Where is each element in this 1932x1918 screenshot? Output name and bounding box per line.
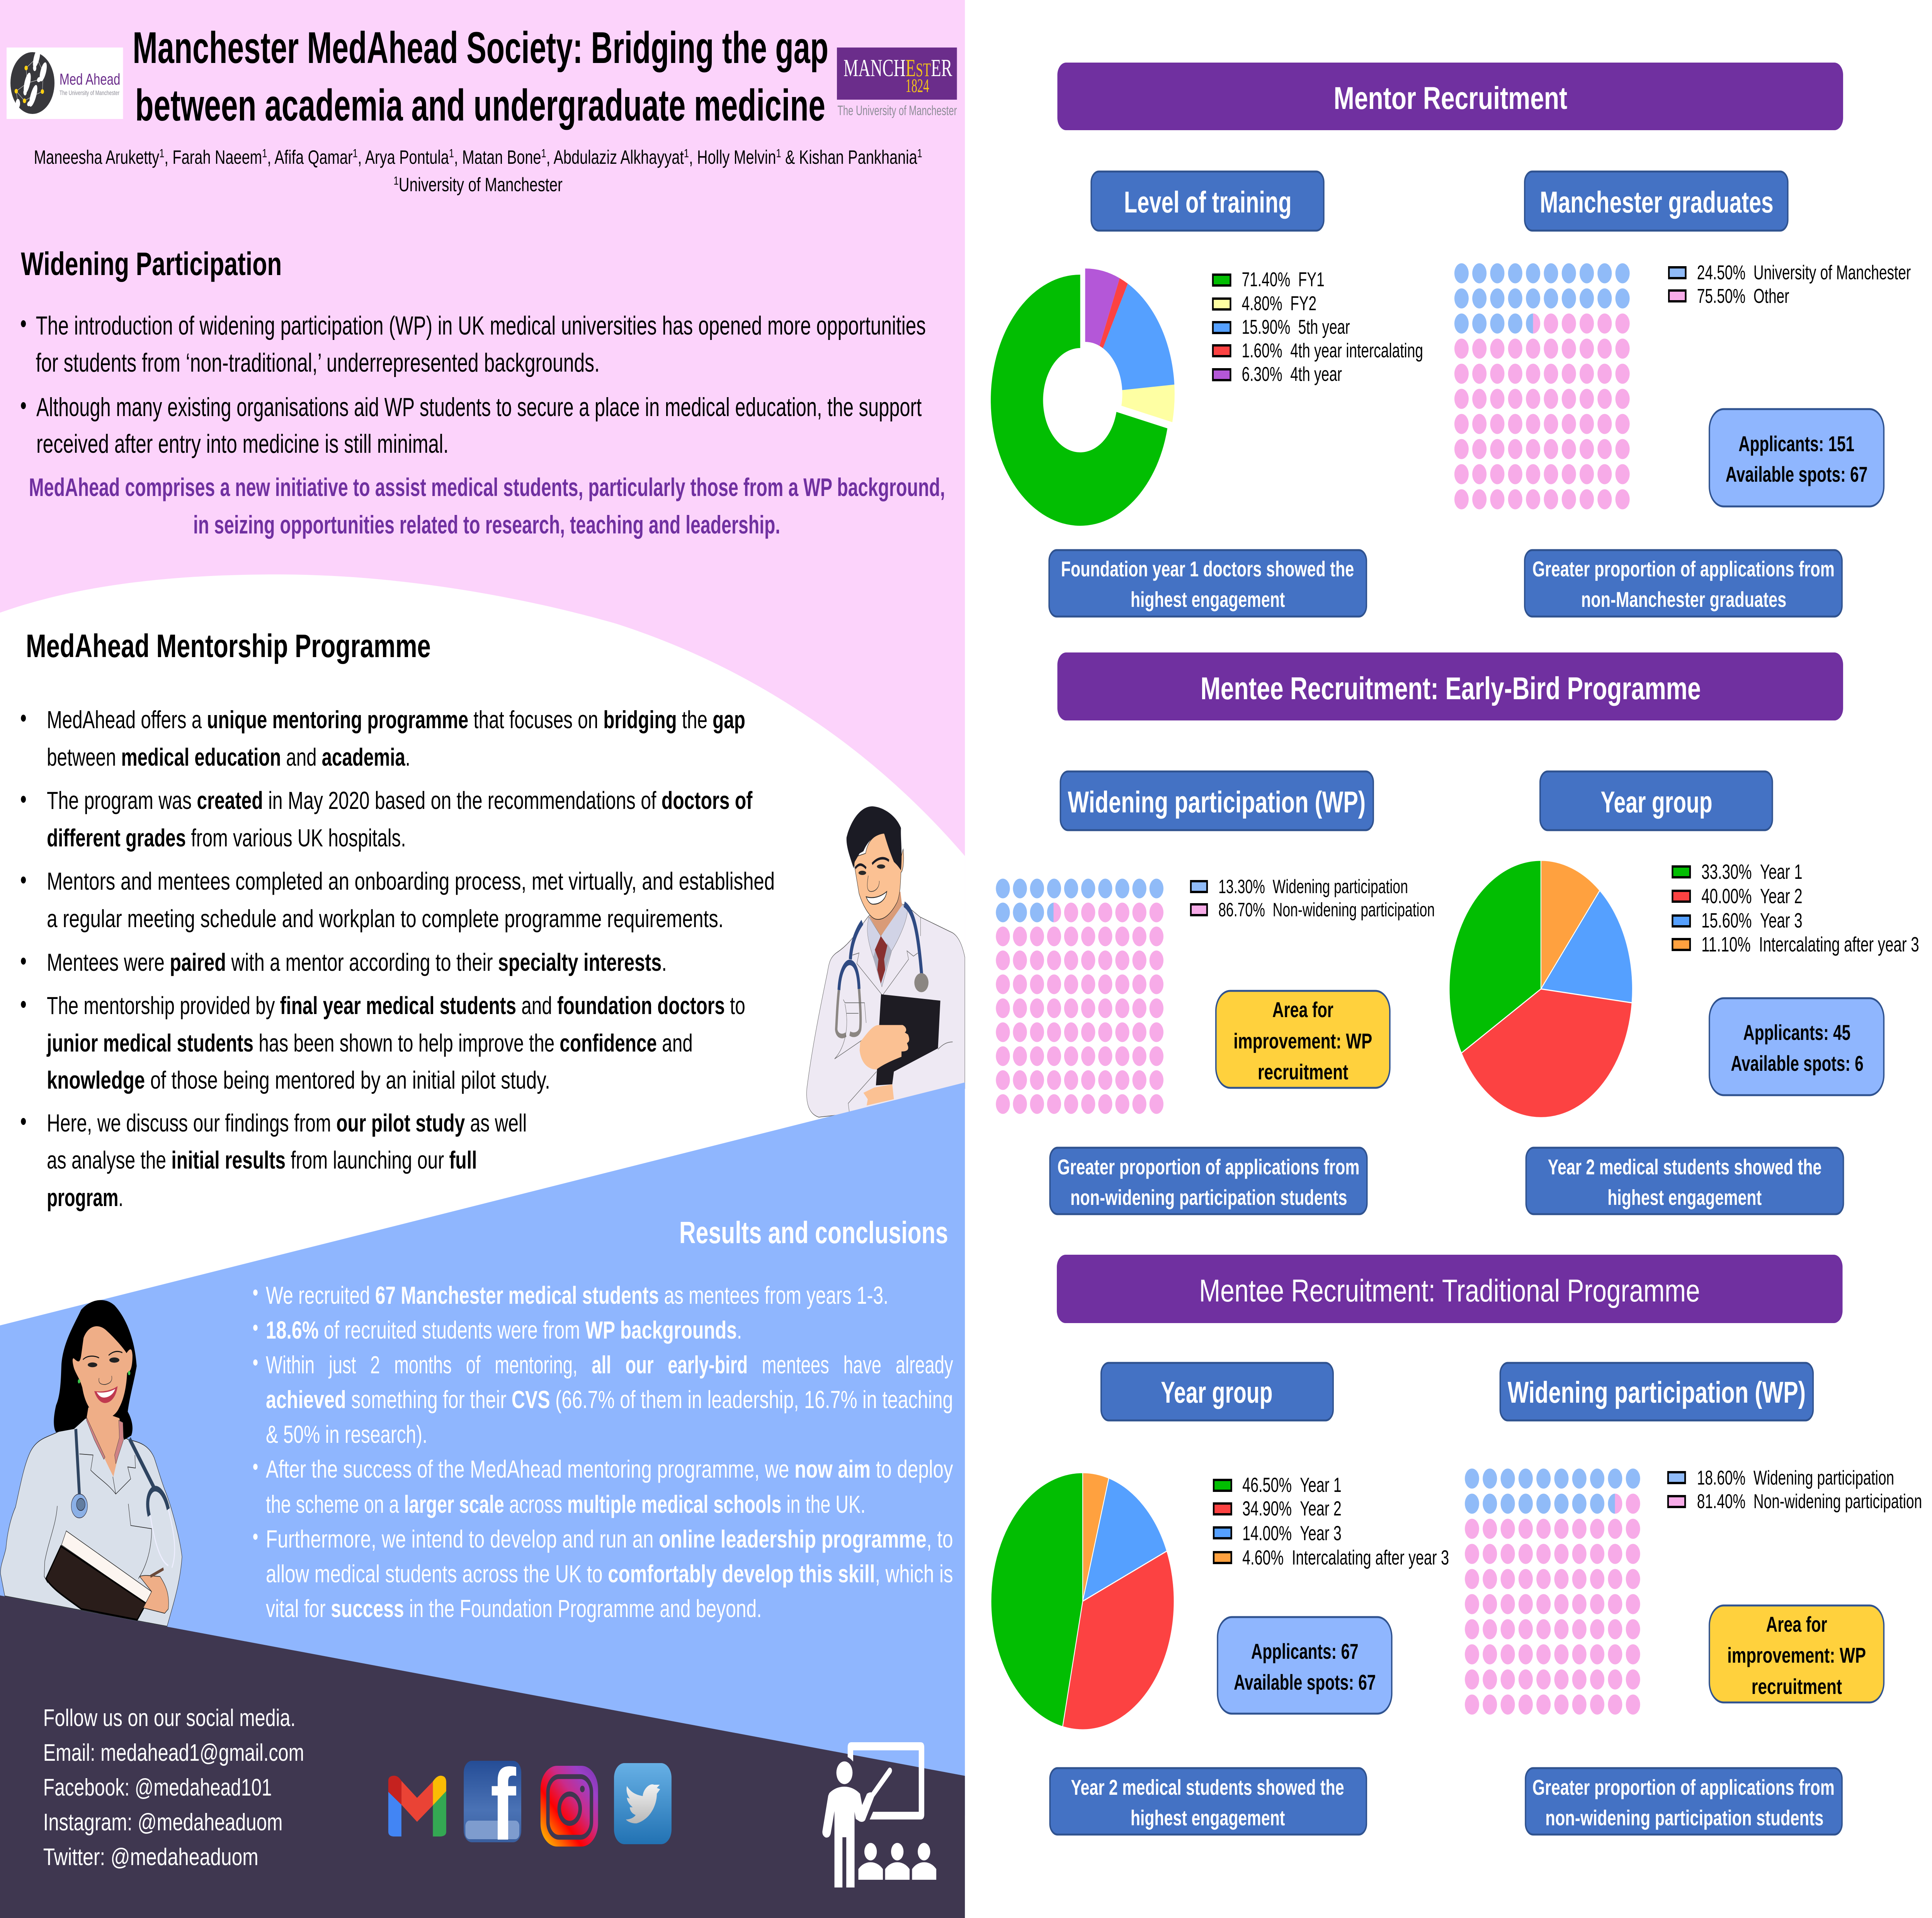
background: white curved section	[0, 574, 965, 1352]
caption: year 2 engagement	[1050, 1768, 1366, 1835]
authors and affiliation: 1	[917, 146, 922, 160]
logo: Med Ahead: Med Ahead	[60, 70, 120, 88]
icon: Facebook: f	[490, 1748, 517, 1861]
title: between academia and undergraduate medicine	[135, 81, 825, 130]
legend: year group: 33.30% Year 1	[1701, 860, 1803, 883]
callout: area for improvement: recruitment	[1258, 1060, 1348, 1084]
text block: mentorship programme bullets: program.	[47, 1184, 123, 1211]
text block: results bullets	[253, 1281, 953, 1622]
section: Mentor Recruitment	[991, 63, 1911, 617]
callout: area for improvement: Area for	[1766, 1612, 1827, 1637]
text block: social media contacts: Email: medahead1@gmail.com	[43, 1740, 304, 1766]
banner: Early-Bird Programme: Mentee Recruitment: Early-Bird Programme	[1201, 671, 1701, 706]
waffle chart: widening participation	[994, 877, 1165, 1116]
caption: non-widening participation: non-widening participation students	[1545, 1806, 1823, 1830]
text block: MedAhead purple statement	[29, 473, 945, 539]
callout: area for improvement: improvement: WP	[1727, 1643, 1866, 1668]
text block: mentorship programme bullets: junior medical students has been shown to help improve the confidence and	[46, 1029, 693, 1057]
legend: level of training	[1213, 268, 1423, 386]
legend: level of training: 4.80% FY2	[1242, 292, 1316, 315]
legend: level of training: 6.30% 4th year	[1242, 363, 1342, 386]
text block: results bullets: Within just 2 months of mentoring, all our early-bird mentees have already	[266, 1351, 953, 1379]
text block: social media contacts: Follow us on our social media.	[43, 1705, 296, 1731]
text block: results bullets: vital for success in the Foundation Programme and beyond.	[266, 1595, 762, 1622]
icon: Gmail	[388, 1776, 446, 1836]
text block: results bullets: Furthermore, we intend to develop and run an online leadership programme , to	[266, 1525, 953, 1553]
callout: area for improvement: Area for	[1272, 998, 1333, 1022]
text block: mentorship programme bullets: as analyse the initial results from launching our full	[47, 1146, 477, 1174]
callout: area for improvement: recruitment	[1752, 1675, 1842, 1699]
callout: applicants 45: Available spots: 6	[1731, 1052, 1864, 1076]
icon: Instagram	[541, 1766, 598, 1847]
text block: mentorship programme bullets	[21, 706, 775, 1211]
authors and affiliation: & Kishan Pankhania	[781, 147, 917, 168]
text block: results bullets: allow medical students across the UK to comfortably develop this skill , which is	[266, 1560, 953, 1588]
legend: year group: 14.00% Year 3	[1242, 1522, 1342, 1545]
authors and affiliation: , Arya Pontula	[358, 147, 449, 168]
heading: Manchester graduates: Manchester graduates	[1540, 186, 1774, 219]
callout: applicants 151	[1709, 409, 1884, 506]
legend: widening participation: 81.40% Non-widening participation	[1697, 1490, 1922, 1513]
legend: year group: 40.00% Year 2	[1701, 885, 1803, 908]
legend: Manchester graduates: 24.50% University of Manchester	[1697, 261, 1911, 284]
authors and affiliation: 1	[353, 146, 358, 160]
authors and affiliation	[34, 146, 922, 196]
callout: applicants 45: Applicants: 45	[1743, 1021, 1850, 1045]
caption: year 2 engagement: highest engagement	[1607, 1186, 1762, 1210]
logo: University of Manchester	[837, 48, 957, 118]
icon: Twitter	[614, 1763, 672, 1844]
text block: results bullets: & 50% in research).	[266, 1420, 427, 1448]
heading: MedAhead Mentorship Programme: MedAhead Mentorship Programme	[26, 628, 431, 664]
pie chart: year group	[1449, 860, 1633, 1118]
legend: year group	[1214, 1473, 1449, 1569]
pie chart: year group	[991, 1473, 1174, 1730]
banner: Traditional Programme: Mentee Recruitment: Traditional Programme	[1199, 1273, 1700, 1308]
text block: widening participation bullets: Although many existing organisations aid WP students to secure a place in medical education, the support	[36, 392, 922, 422]
text block: mentorship programme bullets: The mentorship provided by final year medical students and foundation doctors to	[47, 992, 745, 1019]
caption: non-widening participation: Greater proportion of applications from	[1057, 1155, 1360, 1179]
text block: mentorship programme bullets: between medical education and academia.	[47, 743, 410, 771]
authors and affiliation: 1	[541, 146, 546, 160]
authors and affiliation: 1	[449, 146, 454, 160]
text block: MedAhead purple statement: MedAhead comprises a new initiative to assist medical students, particularly those from a WP background,	[29, 473, 945, 502]
heading: Year group: Year group	[1600, 786, 1713, 819]
legend: level of training: 71.40% FY1	[1242, 268, 1325, 291]
heading: Year group	[1540, 771, 1772, 830]
callout: applicants 45	[1709, 998, 1884, 1095]
legend: year group: 34.90% Year 2	[1242, 1497, 1342, 1520]
caption: foundation year 1	[1049, 550, 1366, 617]
authors and affiliation: , Abdulaziz Alkhayyat	[546, 147, 684, 168]
illustration: male doctor	[807, 806, 965, 1117]
legend: year group: 4.60% Intercalating after year 3	[1242, 1546, 1449, 1569]
caption: non-widening participation: non-widening participation students	[1070, 1186, 1347, 1210]
legend: widening participation	[1191, 876, 1435, 921]
legend: widening participation: 86.70% Non-widening participation	[1218, 899, 1435, 921]
authors and affiliation: , Matan Bone	[454, 147, 541, 168]
text block: mentorship programme bullets: Mentees were paired with a mentor according to their specialty interests .	[47, 948, 667, 976]
caption: non-Manchester graduates	[1525, 550, 1842, 617]
callout: applicants 67	[1218, 1617, 1392, 1714]
text block: results bullets: After the success of the MedAhead mentoring programme, we now aim to deploy	[266, 1455, 953, 1483]
logo: Med Ahead: The University of Manchester	[60, 90, 119, 97]
icon: Facebook	[464, 1748, 521, 1861]
legend: year group: 11.10% Intercalating after year 3	[1701, 933, 1919, 956]
legend: year group: 15.60% Year 3	[1701, 909, 1803, 932]
heading: Results and conclusions: Results and conclusions	[679, 1215, 948, 1250]
text block: widening participation bullets: The introduction of widening participation (WP) in UK medical universities has opened more opportunities	[36, 311, 926, 340]
text block: results bullets: We recruited 67 Manchester medical students as mentees from years 1-3.	[266, 1281, 888, 1309]
text block: mentorship programme bullets: Mentors and mentees completed an onboarding process, met virtually, and established	[47, 867, 775, 895]
logo: University of Manchester: MANCHESTER	[844, 54, 952, 82]
text block: mentorship programme bullets: Here, we discuss our findings from our pilot study as well	[47, 1109, 527, 1137]
logo: University of Manchester: 1824	[905, 75, 929, 97]
callout: applicants 67: Available spots: 67	[1234, 1670, 1376, 1695]
legend: level of training: 15.90% 5th year	[1242, 316, 1350, 338]
caption: non-widening participation	[1050, 1148, 1367, 1214]
icon: teacher with audience	[822, 1742, 936, 1887]
banner: Traditional Programme	[1057, 1255, 1843, 1323]
heading: Year group	[1101, 1363, 1333, 1420]
text block: results bullets: the scheme on a larger scale across multiple medical schools in the UK.	[266, 1490, 866, 1518]
section: Mentee Recruitment Traditional	[991, 1255, 1922, 1835]
background: dark footer section	[0, 1595, 965, 1918]
text block: mentorship programme bullets: The program was created in May 2020 based on the recommendations of doctors of	[47, 787, 753, 814]
text block: widening participation bullets: received after entry into medicine is still minimal.	[36, 429, 449, 459]
text block: mentorship programme bullets: a regular meeting schedule and workplan to complete programme requirements.	[47, 905, 724, 933]
caption: year 2 engagement	[1526, 1148, 1844, 1214]
logo: Med Ahead	[7, 47, 123, 119]
caption: non-Manchester graduates: non-Manchester graduates	[1581, 588, 1786, 612]
caption: year 2 engagement: Year 2 medical students showed the	[1548, 1155, 1821, 1179]
authors and affiliation: , Afifa Qamar	[267, 147, 353, 168]
authors and affiliation: , Farah Naeem	[164, 147, 262, 168]
heading: Level of training	[1091, 172, 1324, 231]
background: pink left panel	[0, 0, 965, 1159]
caption: non-widening participation	[1526, 1768, 1842, 1835]
legend: Manchester graduates: 75.50% Other	[1697, 285, 1789, 307]
authors and affiliation: , Holly Melvin	[689, 147, 776, 168]
legend: year group	[1672, 860, 1919, 956]
text block: mentorship programme bullets: knowledge of those being mentored by an initial pilot study.	[47, 1066, 550, 1094]
waffle chart: Manchester graduates	[1452, 261, 1631, 512]
title: Manchester MedAhead Society: Bridging the gap	[133, 23, 828, 73]
callout: applicants 151: Available spots: 67	[1726, 462, 1867, 487]
text block: mentorship programme bullets: different grades from various UK hospitals.	[47, 824, 406, 852]
donut chart: level of training	[991, 268, 1175, 526]
authors and affiliation: Maneesha Aruketty	[34, 147, 151, 168]
title	[133, 23, 828, 130]
background: blue results section	[0, 1082, 965, 1816]
text block: social media contacts	[43, 1705, 304, 1870]
caption: non-widening participation: Greater proportion of applications from	[1532, 1775, 1835, 1800]
heading: Widening participation (WP)	[1500, 1363, 1813, 1420]
banner: Early-Bird Programme	[1057, 652, 1843, 720]
callout: applicants 151: Applicants: 151	[1738, 432, 1854, 456]
text block: results bullets: 18.6% of recruited students were from WP backgrounds .	[266, 1316, 742, 1344]
section: Mentee Recruitment Early-Bird	[994, 652, 1919, 1214]
text block: mentorship programme bullets: MedAhead offers a unique mentoring programme that focuses on bridging the gap	[47, 706, 745, 734]
heading: Widening participation (WP): Widening participation (WP)	[1068, 786, 1366, 819]
callout: area for improvement	[1216, 991, 1390, 1088]
logo: University of Manchester: The University of Manchester	[837, 103, 957, 118]
illustration: female doctor	[0, 1300, 182, 1626]
waffle chart: widening participation	[1463, 1466, 1642, 1717]
heading: Widening participation (WP): Widening participation (WP)	[1508, 1376, 1806, 1409]
authors and affiliation: 1	[159, 146, 164, 160]
heading: Year group: Year group	[1161, 1376, 1272, 1409]
text block: widening participation bullets	[21, 311, 926, 459]
banner: Mentor Recruitment: Mentor Recruitment	[1334, 81, 1567, 116]
callout: area for improvement	[1709, 1605, 1884, 1702]
text block: widening participation bullets: for students from ‘non-traditional,’ underrepresented backgrounds.	[36, 348, 600, 377]
caption: year 2 engagement: Year 2 medical students showed the	[1071, 1775, 1344, 1800]
authors and affiliation: 1	[394, 174, 399, 187]
text block: MedAhead purple statement: in seizing opportunities related to research, teaching and leadership.	[193, 511, 780, 539]
heading: Level of training: Level of training	[1124, 186, 1292, 219]
heading: Widening participation (WP)	[1060, 771, 1373, 830]
authors and affiliation: 1	[776, 146, 781, 160]
legend: Manchester graduates	[1669, 261, 1911, 307]
legend: widening participation: 13.30% Widening participation	[1218, 876, 1408, 898]
text block: social media contacts: Twitter: @medaheaduom	[43, 1844, 259, 1870]
legend: widening participation: 18.60% Widening participation	[1697, 1466, 1894, 1489]
caption: year 2 engagement: highest engagement	[1131, 1806, 1285, 1830]
heading: Widening Participation: Widening Participation	[21, 246, 282, 282]
caption: foundation year 1: highest engagement	[1131, 588, 1285, 612]
text block: social media contacts: Facebook: @medahead101	[43, 1774, 272, 1801]
callout: area for improvement: improvement: WP	[1233, 1029, 1372, 1053]
authors and affiliation: University of Manchester	[399, 174, 563, 196]
authors and affiliation: 1	[684, 146, 689, 160]
legend: level of training: 1.60% 4th year intercalating	[1242, 339, 1423, 362]
legend: year group: 46.50% Year 1	[1242, 1473, 1342, 1497]
legend: widening participation	[1668, 1466, 1922, 1513]
text block: social media contacts: Instagram: @medaheaduom	[43, 1809, 282, 1836]
banner: Mentor Recruitment	[1057, 63, 1843, 130]
authors and affiliation: 1	[262, 146, 267, 160]
heading: Manchester graduates	[1525, 172, 1788, 231]
caption: foundation year 1: Foundation year 1 doctors showed the	[1061, 557, 1354, 581]
caption: non-Manchester graduates: Greater proportion of applications from	[1532, 557, 1835, 581]
text block: results bullets: achieved something for their CVS (66.7% of them in leadership, 16.7% in teaching	[266, 1386, 953, 1413]
callout: applicants 67: Applicants: 67	[1251, 1639, 1359, 1664]
